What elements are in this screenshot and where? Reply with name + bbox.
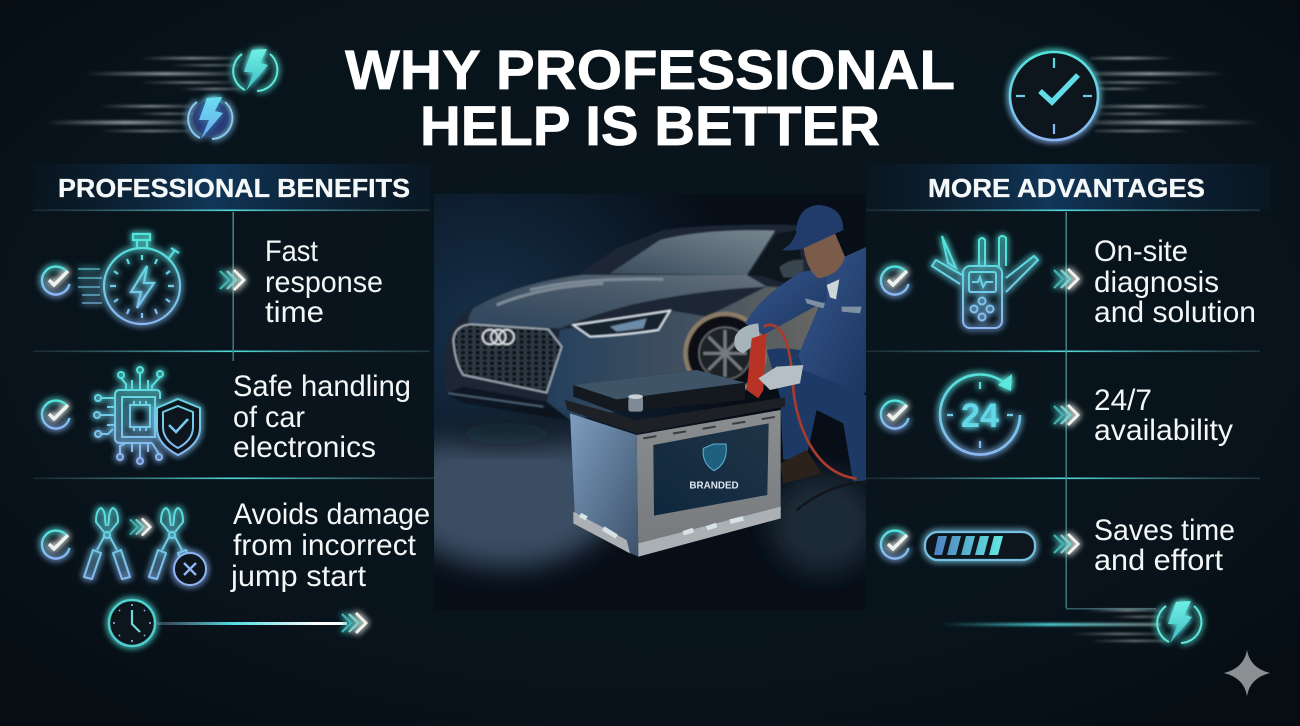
text: on-site diagnosis and solution: and solution — [1094, 296, 1256, 329]
icon: check — [42, 531, 70, 559]
text: safe handling of car electronics: electronics — [233, 431, 376, 464]
row: on-site diagnosis — [881, 235, 1256, 329]
text: saves time and effort — [1094, 514, 1235, 577]
text: fast response time: Fast — [265, 235, 318, 268]
title: WHY PROFESSIONAL — [345, 38, 955, 101]
text: saves time and effort: Saves time — [1094, 514, 1235, 547]
icon: chip and shield — [94, 367, 200, 464]
icon: check — [881, 401, 908, 429]
row: 24/7 availability — [881, 374, 1233, 455]
icon: check — [42, 267, 70, 295]
row: saves time and effort — [881, 514, 1235, 577]
car headlight — [573, 311, 670, 337]
text: on-site diagnosis and solution — [1094, 235, 1256, 329]
icon: check — [881, 531, 908, 559]
central illustration: car, battery and mechanic — [434, 194, 866, 578]
arrow: chevrons — [1054, 534, 1078, 554]
arrow: chevrons — [1054, 405, 1078, 425]
text: avoids damage from incorrect jump start — [230, 498, 430, 593]
icon: 24 hour clock: 24 — [961, 397, 999, 435]
jumper cable and gloves — [734, 323, 867, 510]
arrow: small chevrons — [130, 518, 150, 536]
car badge rings — [483, 330, 514, 344]
title: HELP IS BETTER — [420, 94, 880, 157]
icon: clock with check and speed lines — [1010, 52, 1260, 140]
arrow: chevrons — [1054, 269, 1078, 289]
icon: sparkle watermark — [1224, 650, 1270, 696]
battery brand text: BRANDED — [689, 481, 739, 492]
icon: diagnostic tool — [932, 236, 1038, 328]
title — [345, 38, 955, 157]
icon: teal lightning with speed lines — [85, 49, 277, 91]
icon: 24 hour clock — [940, 374, 1020, 455]
icon: bottom lightning with speed lines — [940, 601, 1201, 643]
arrow: chevrons — [220, 270, 244, 290]
mechanic — [745, 205, 867, 483]
heading: professional benefits: PROFESSIONAL BENEFITS — [58, 173, 410, 203]
text: saves time and effort: and effort — [1094, 544, 1223, 577]
text: safe handling of car electronics — [233, 370, 411, 464]
car reflection — [443, 422, 570, 445]
text: fast response time — [265, 235, 383, 329]
heading band: more advantages — [866, 164, 1270, 210]
text: on-site diagnosis and solution: On-site — [1094, 235, 1188, 268]
icon: progress bar — [925, 532, 1035, 560]
row: safe handling — [42, 367, 411, 464]
icon: clock with arrow — [109, 600, 366, 646]
car grille — [453, 324, 562, 393]
text: safe handling of car electronics: of car — [233, 401, 305, 434]
text: avoids damage from incorrect jump start: jump start — [230, 560, 366, 593]
icon: jumper clamps — [84, 508, 206, 585]
text: fast response time: time — [265, 296, 324, 329]
battery shield logo — [703, 444, 726, 471]
text: avoids damage from incorrect jump start: Avoids damage — [233, 498, 430, 531]
battery terminal — [628, 394, 643, 412]
icon: stopwatch — [78, 234, 180, 324]
row: fast response time — [42, 234, 383, 329]
row: avoids damage — [42, 498, 430, 593]
icon: blue lightning with speed lines — [45, 97, 232, 139]
heading: more advantages: MORE ADVANTAGES — [928, 173, 1205, 203]
text: 24/7 availability: availability — [1094, 414, 1233, 447]
panel: section heading bands and grid — [33, 164, 1270, 608]
icon: check — [881, 267, 908, 295]
text: safe handling of car electronics: Safe handling — [233, 370, 411, 403]
text: 24/7 availability — [1094, 384, 1233, 447]
battery — [565, 370, 785, 557]
heading band: professional benefits — [33, 164, 430, 210]
battery label — [653, 423, 769, 516]
text: 24/7 availability: 24/7 — [1094, 384, 1152, 417]
text: avoids damage from incorrect jump start: from incorrect — [233, 529, 416, 562]
text: fast response time: response — [265, 266, 383, 299]
icon: check — [42, 401, 70, 429]
car — [445, 225, 827, 420]
car wheel — [683, 312, 767, 395]
text: on-site diagnosis and solution: diagnosis — [1094, 266, 1219, 299]
